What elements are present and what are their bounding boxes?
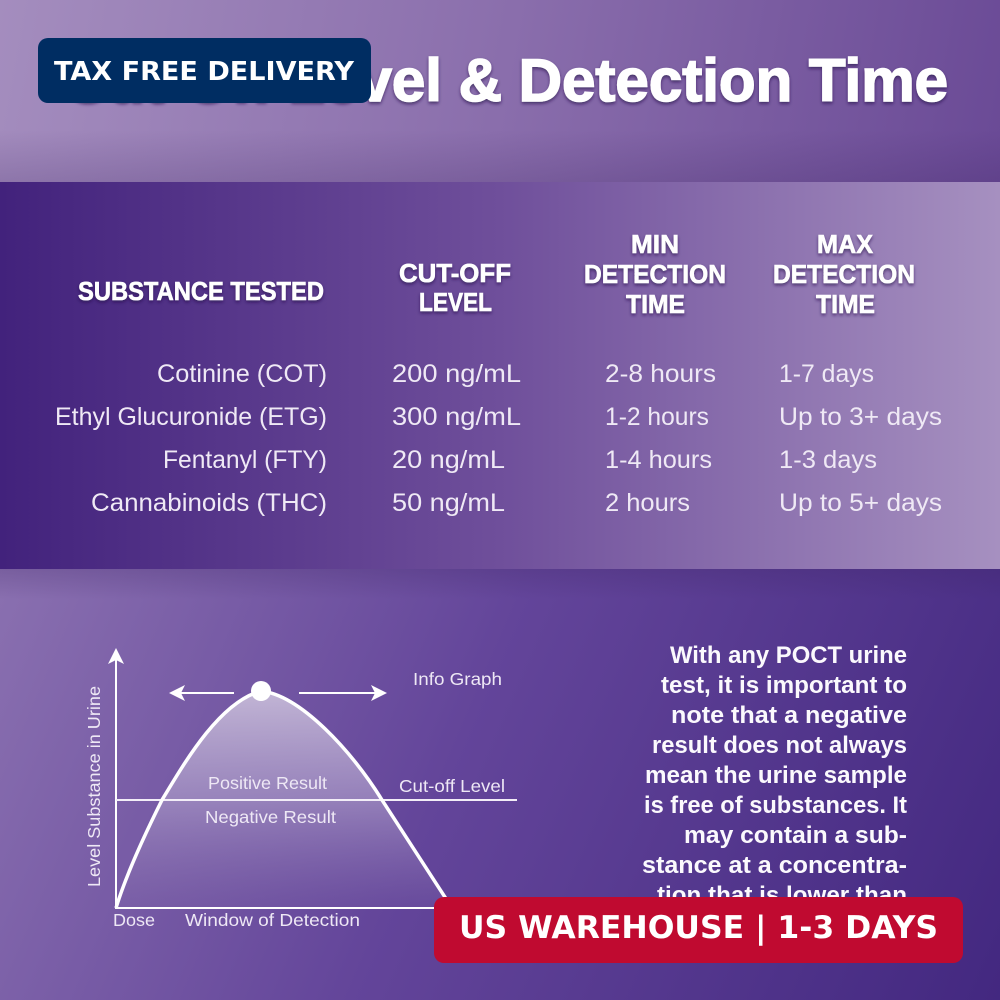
table row: cotinine xyxy=(157,360,874,388)
text block: negative result note: mean the urine sample xyxy=(645,762,907,789)
x axis xyxy=(115,907,460,909)
badge: us warehouse: US WAREHOUSE | 1-3 DAYS xyxy=(459,910,938,946)
text block: negative result note: test, it is important to xyxy=(661,672,907,699)
chart labels: Level Substance in Urine xyxy=(84,686,104,887)
chart labels xyxy=(84,669,505,930)
table row: cotinine: 2-8 hours xyxy=(605,360,716,388)
table header: max detection time xyxy=(773,229,915,319)
table row: ethyl glucuronide xyxy=(55,403,942,431)
table row: cotinine: 1-7 days xyxy=(779,360,874,388)
left arrow xyxy=(169,685,234,701)
table row: ethyl glucuronide: Ethyl Glucuronide (ETG) xyxy=(55,403,327,431)
panel: detection table xyxy=(0,182,1000,569)
table row: ethyl glucuronide: 300 ng/mL xyxy=(392,403,521,431)
curve line xyxy=(116,691,452,908)
text block: negative result note: With any POCT urine xyxy=(670,642,907,669)
table header: min detection time xyxy=(584,229,726,319)
text block: negative result note: is free of substances. It xyxy=(644,792,907,819)
chart labels: Info Graph xyxy=(413,669,502,689)
badge: tax free delivery: TAX FREE DELIVERY xyxy=(54,57,355,87)
table row: fentanyl xyxy=(163,446,877,474)
chart labels: Window of Detection xyxy=(185,910,360,930)
peak marker xyxy=(251,681,271,701)
badge: us warehouse xyxy=(434,897,963,963)
table row: cannabinoids: Up to 5+ days xyxy=(779,489,942,517)
table row: cotinine: Cotinine (COT) xyxy=(157,360,327,388)
table header: min detection time: TIME xyxy=(626,289,685,319)
table row: fentanyl: 20 ng/mL xyxy=(392,446,505,474)
table row: fentanyl: 1-3 days xyxy=(779,446,877,474)
title: Cut-Off Level & Detection Time xyxy=(65,47,948,114)
chart labels: Dose xyxy=(113,910,155,930)
table header: max detection time: DETECTION xyxy=(773,259,915,289)
y axis with arrow xyxy=(108,648,124,908)
table header: max detection time: MAX xyxy=(817,229,874,259)
curve fill xyxy=(116,691,452,908)
table row: cannabinoids: 50 ng/mL xyxy=(392,489,505,517)
table header: max detection time: TIME xyxy=(816,289,875,319)
text block: negative result note: note that a negative xyxy=(671,702,907,729)
table row: fentanyl: 1-4 hours xyxy=(605,446,712,474)
right arrow xyxy=(299,685,387,701)
panel: bottom background xyxy=(0,569,1000,1000)
table row: cannabinoids: 2 hours xyxy=(605,489,690,517)
table row: cannabinoids xyxy=(91,489,942,517)
text block: negative result note: stance at a concentra- xyxy=(642,852,907,879)
text block: negative result note: tion that is lower than xyxy=(657,882,907,909)
table row: ethyl glucuronide: Up to 3+ days xyxy=(779,403,942,431)
table header: substance tested: SUBSTANCE TESTED xyxy=(78,276,324,306)
chart labels: Positive Result xyxy=(208,773,327,793)
badge: tax free delivery xyxy=(38,38,371,103)
table header: cut-off level: CUT-OFF xyxy=(399,258,511,288)
text block: negative result note: result does not always xyxy=(652,732,907,759)
table header: cut-off level xyxy=(399,258,511,317)
chart: detection curve info graph xyxy=(84,648,517,930)
table header: min detection time: DETECTION xyxy=(584,259,726,289)
cut-off line xyxy=(116,799,517,801)
table row: ethyl glucuronide: 1-2 hours xyxy=(605,403,709,431)
table header: min detection time: MIN xyxy=(631,229,679,259)
text block: negative result note: may contain a sub- xyxy=(684,822,907,849)
table row: cotinine: 200 ng/mL xyxy=(392,360,521,388)
text block: negative result note xyxy=(642,642,907,909)
panel: title band xyxy=(0,0,1000,182)
chart labels: Cut-off Level xyxy=(399,776,505,796)
table row: fentanyl: Fentanyl (FTY) xyxy=(163,446,327,474)
chart labels: Negative Result xyxy=(205,807,336,827)
table header: cut-off level: LEVEL xyxy=(419,287,492,317)
table row: cannabinoids: Cannabinoids (THC) xyxy=(91,489,327,517)
